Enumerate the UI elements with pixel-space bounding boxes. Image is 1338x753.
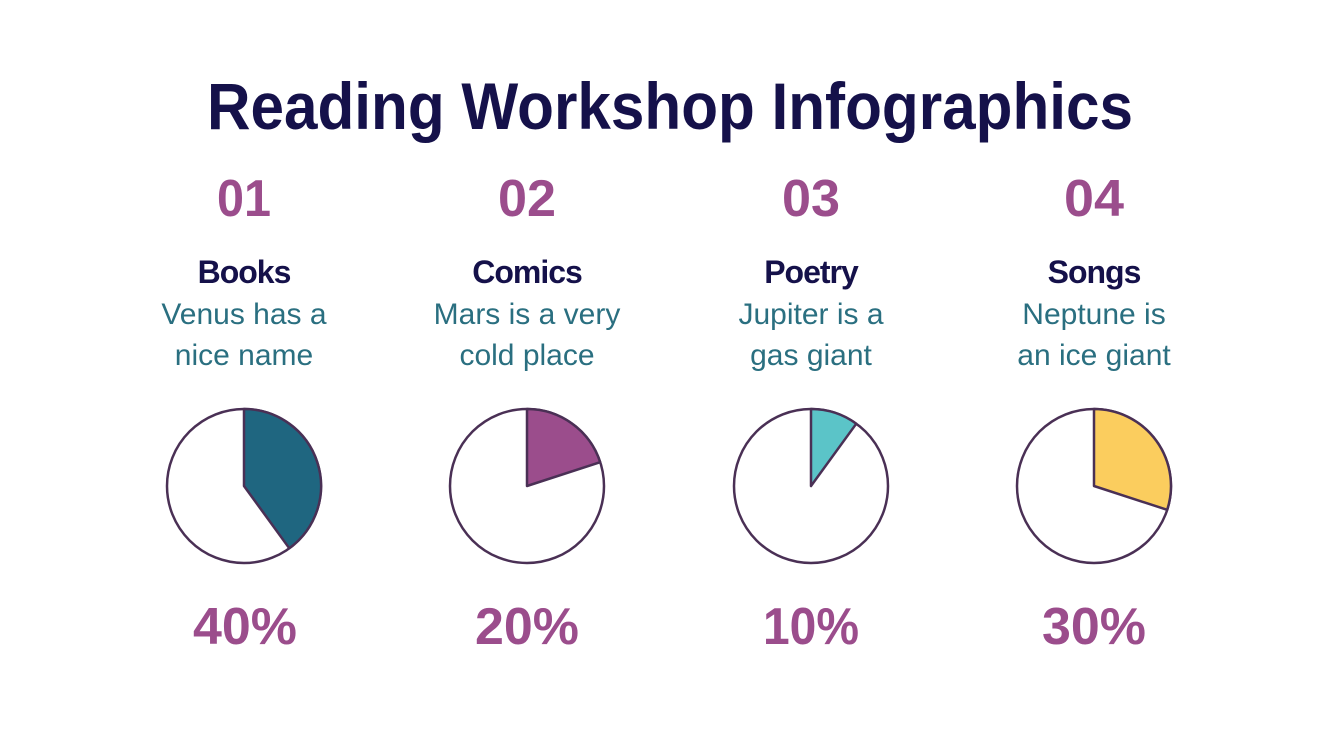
title: Reading Workshop Infographics	[207, 69, 1133, 143]
pie chart 10%	[734, 409, 888, 563]
percentage 40%: 40%	[193, 598, 297, 656]
description: Jupiter is a	[738, 298, 884, 331]
number 04: 04	[1064, 170, 1124, 228]
pie chart 30%	[1017, 409, 1171, 563]
description	[434, 298, 620, 372]
panel: comics	[434, 170, 620, 656]
percentage 30%: 30%	[1042, 598, 1146, 656]
description: cold place	[459, 339, 595, 372]
heading: Songs: Songs	[1048, 254, 1141, 290]
panel: songs	[1017, 170, 1171, 656]
panel: books	[161, 170, 327, 656]
heading: Books: Books	[198, 254, 291, 290]
description	[161, 298, 327, 372]
panel: poetry	[734, 170, 888, 656]
description: nice name	[175, 339, 313, 372]
number 03: 03	[782, 170, 840, 228]
number 01: 01	[217, 170, 271, 228]
description: gas giant	[750, 339, 873, 372]
description	[738, 298, 884, 372]
number 02: 02	[498, 170, 556, 228]
description: Mars is a very	[434, 298, 620, 331]
heading: Comics: Comics	[472, 254, 582, 290]
description: Neptune is	[1022, 298, 1166, 331]
description: Venus has a	[161, 298, 327, 331]
description: an ice giant	[1017, 339, 1171, 372]
heading: Poetry: Poetry	[764, 254, 859, 290]
pie chart 20%	[450, 409, 604, 563]
percentage 20%: 20%	[475, 598, 579, 656]
percentage 10%: 10%	[763, 598, 859, 656]
pie chart 40%	[167, 409, 321, 563]
description	[1017, 298, 1171, 372]
